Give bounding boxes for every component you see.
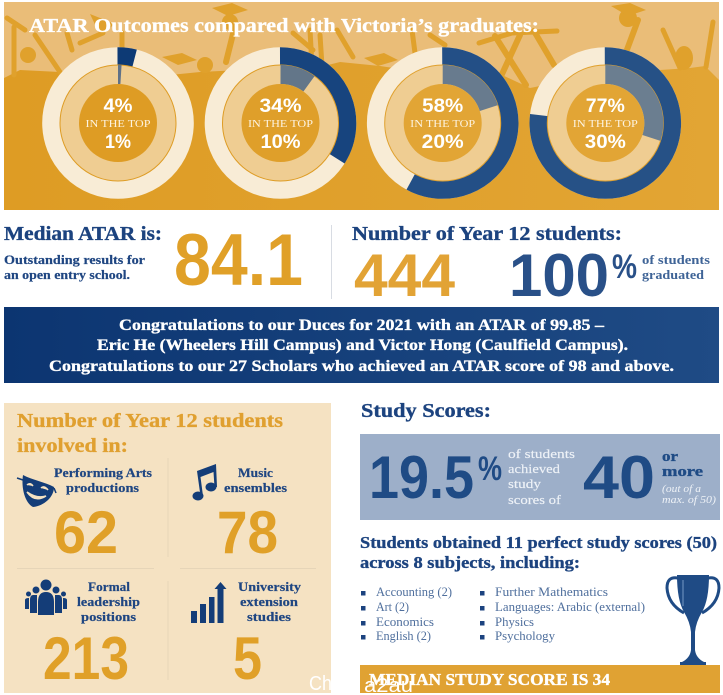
- donut: 77% in the top 30%: IN THE TOP: [573, 119, 638, 130]
- panel: 19.5% study score stat: [360, 434, 720, 520]
- donut: 77% in the top 30%: 77%: [586, 96, 625, 117]
- donut: 4% in the top 1%: IN THE TOP: [86, 119, 151, 130]
- panel: 19.5% study score stat: scores of: [508, 492, 562, 507]
- panel: number of year 12 students: Number of Year 12 students:: [352, 223, 622, 245]
- watermark: Ch: [309, 673, 332, 695]
- callout: median study score: [360, 665, 720, 693]
- heading: study scores: Study Scores:: [361, 400, 491, 422]
- donut: 34% in the top 10%: 34%: [260, 96, 302, 117]
- donut: 34% in the top 10%: 10%: [260, 132, 301, 153]
- panel: student involvement: productions: [66, 480, 139, 495]
- panel: student involvement: involved in:: [17, 435, 128, 457]
- panel: median ATAR: an open entry school.: [4, 267, 130, 282]
- list: subjects column two: Languages: Arabic (external): [495, 599, 645, 614]
- panel: student involvement: University: [238, 579, 302, 594]
- panel: student involvement: 5: [233, 625, 262, 692]
- icon: rising bars with arrow: [191, 582, 226, 623]
- panel: number of year 12 students: %: [612, 248, 637, 286]
- panel: student involvement: 78: [217, 499, 278, 566]
- panel: student involvement: ensembles: [224, 480, 287, 495]
- list: subjects column one: Economics: [376, 614, 434, 629]
- panel: median ATAR: 84.1: [174, 220, 303, 301]
- panel: 19.5% study score stat: 19.5: [369, 444, 474, 511]
- donut: 58% in the top 20%: 20%: [422, 132, 464, 153]
- donut: 58% in the top 20%: [376, 56, 510, 190]
- donut: 4% in the top 1%: [51, 56, 185, 190]
- panel: student involvement: studies: [247, 609, 291, 624]
- donut: 4% in the top 1%: 1%: [105, 132, 131, 153]
- panel: 19.5% study score stat: study: [508, 476, 542, 491]
- panel: 19.5% study score stat: %: [478, 450, 502, 488]
- donut: 58% in the top 20%: 58%: [422, 96, 463, 117]
- heading: perfect study scores: [360, 533, 717, 572]
- panel: median ATAR: Outstanding results for: [4, 252, 145, 267]
- title: ATAR Outcomes compared with Victoria’s graduates:: [29, 15, 539, 37]
- panel: student involvement: Music: [238, 465, 273, 480]
- panel: 19.5% study score stat: more: [662, 464, 703, 480]
- icon: trophy: [667, 575, 719, 665]
- icon: music notes: [192, 464, 217, 500]
- panel: median ATAR: [4, 220, 303, 301]
- panel: number of year 12 students: of students: [642, 252, 710, 267]
- heading: perfect study scores: across 8 subjects, including:: [360, 553, 580, 572]
- list: subjects column one: Accounting (2): [376, 584, 452, 599]
- panel: number of year 12 students: 444: [354, 242, 456, 309]
- graduates silhouette: [4, 3, 719, 210]
- panel: student involvement: Number of Year 12 students: [17, 410, 283, 432]
- panel: student involvement: [4, 403, 331, 693]
- panel: congratulations band: Eric He (Wheelers Hill Campus) and Victor Hong (Caulfield Campus).: [97, 337, 628, 354]
- donut: 77% in the top 30%: 30%: [585, 132, 626, 153]
- panel: student involvement: leadership: [77, 594, 140, 609]
- panel: number of year 12 students: graduated: [642, 267, 705, 282]
- panel: number of year 12 students: [352, 223, 710, 309]
- panel: congratulations band: Congratulations to our 27 Scholars who achieved an ATAR score of 98 and above.: [49, 358, 674, 375]
- donut: 34% in the top 10%: IN THE TOP: [248, 119, 313, 130]
- panel: 19.5% study score stat: or: [662, 449, 678, 465]
- icon: theatre mask: [17, 475, 56, 507]
- panel: 19.5% study score stat: achieved: [508, 461, 561, 476]
- panel: 19.5% study score stat: (out of a: [662, 484, 701, 495]
- donut: 34% in the top 10%: [214, 56, 347, 190]
- panel: number of year 12 students: 100: [509, 242, 609, 309]
- panel: 19.5% study score stat: of students: [508, 446, 575, 461]
- list: subjects column two: Physics: [495, 614, 534, 629]
- watermark: [309, 673, 413, 695]
- list: subjects column two: [480, 584, 645, 643]
- panel: student involvement: 213: [43, 625, 129, 692]
- panel: ATAR outcomes banner: [4, 2, 719, 210]
- list: subjects column one: Art (2): [376, 599, 409, 614]
- panel: congratulations band: Congratulations to our Duces for 2021 with an ATAR of 99.85 –: [119, 317, 605, 334]
- donut: 58% in the top 20%: IN THE TOP: [410, 119, 475, 130]
- panel: 19.5% study score stat: 40: [583, 444, 655, 511]
- panel: median ATAR: Median ATAR is:: [4, 223, 162, 245]
- list: subjects column one: [361, 584, 452, 643]
- donut: 4% in the top 1%: 4%: [104, 96, 133, 117]
- panel: student involvement: Performing Arts: [54, 465, 152, 480]
- panel: 19.5% study score stat: max. of 50): [662, 495, 717, 506]
- donut: 77% in the top 30%: [538, 56, 672, 190]
- panel: congratulations band: [4, 307, 719, 383]
- list: subjects column two: Further Mathematics: [495, 584, 608, 599]
- panel: student involvement: positions: [81, 609, 136, 624]
- icon: group of people: [25, 580, 67, 615]
- panel: student involvement: 62: [54, 499, 118, 566]
- list: subjects column one: English (2): [376, 628, 431, 643]
- callout: median study score: MEDIAN STUDY SCORE IS 34: [369, 670, 610, 689]
- panel: student involvement: Formal: [88, 579, 130, 594]
- heading: perfect study scores: Students obtained 11 perfect study scores (50): [360, 533, 717, 552]
- panel: student involvement: extension: [240, 594, 299, 609]
- list: subjects column two: Psychology: [495, 628, 555, 643]
